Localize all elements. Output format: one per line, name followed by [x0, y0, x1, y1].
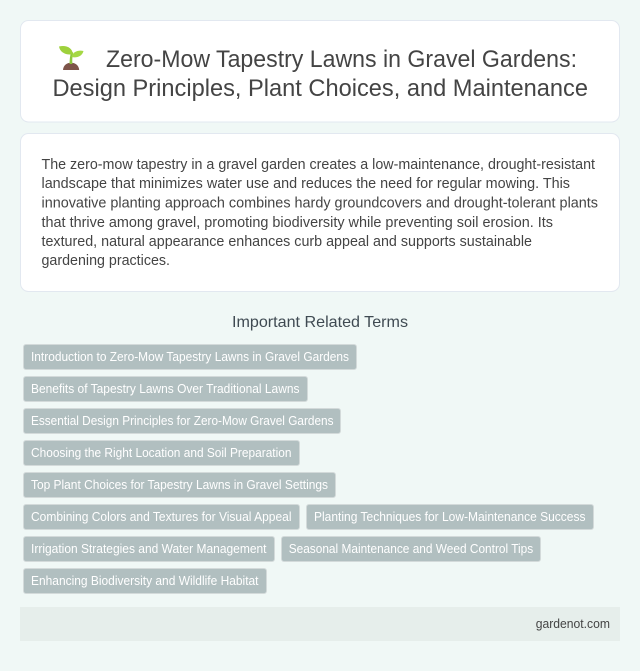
- tag: Seasonal Maintenance and Weed Control Tips: [289, 542, 533, 556]
- footer source text: gardenot.com: [536, 616, 610, 631]
- tag: [306, 504, 594, 530]
- tag: Essential Design Principles for Zero-Mow Gravel Gardens: [31, 414, 334, 428]
- tag: Irrigation Strategies and Water Management: [31, 542, 267, 556]
- description text: [42, 156, 598, 269]
- panel: title card: [20, 20, 620, 122]
- tag: Planting Techniques for Low-Maintenance Success: [314, 510, 586, 524]
- title line 2: Design Principles, Plant Choices, and Maintenance: [52, 75, 588, 102]
- icon: sprout: [59, 46, 84, 70]
- tag list: [24, 344, 594, 594]
- title line 1: Zero-Mow Tapestry Lawns in Gravel Gardens:: [106, 46, 577, 73]
- tag: Enhancing Biodiversity and Wildlife Habitat: [31, 574, 259, 588]
- tag: [24, 536, 274, 562]
- tag: Introduction to Zero-Mow Tapestry Lawns in Gravel Gardens: [31, 350, 349, 364]
- description text: The zero-mow tapestry in a gravel garden creates a low-maintenance, drought-resistant: [42, 156, 596, 173]
- description text: that thrive among gravel, promoting biodiversity while preventing soil erosion. Its: [42, 214, 553, 231]
- description text: landscape that minimizes water use and reduces the need for regular mowing. This: [42, 175, 570, 192]
- description text: gardening practices.: [42, 252, 170, 269]
- description text: textured, natural appearance enhances curb appeal and supports sustainable: [42, 233, 532, 250]
- footer bar: [20, 607, 620, 641]
- tag: [24, 472, 336, 498]
- tag: [24, 504, 300, 530]
- tag: [282, 536, 540, 562]
- tag: [24, 376, 308, 402]
- tag: [24, 344, 356, 370]
- tag: Choosing the Right Location and Soil Preparation: [31, 446, 292, 460]
- tag: Top Plant Choices for Tapestry Lawns in Gravel Settings: [31, 478, 328, 492]
- tag: [24, 408, 340, 434]
- tag: Combining Colors and Textures for Visual Appeal: [31, 510, 292, 524]
- heading: related terms: Important Related Terms: [232, 314, 408, 331]
- tag: Benefits of Tapestry Lawns Over Traditional Lawns: [31, 382, 300, 396]
- panel: description card: [20, 134, 620, 292]
- tag: [24, 568, 266, 594]
- tag: [24, 440, 300, 466]
- description text: innovative planting approach combines hardy groundcovers and drought-tolerant plants: [42, 194, 598, 212]
